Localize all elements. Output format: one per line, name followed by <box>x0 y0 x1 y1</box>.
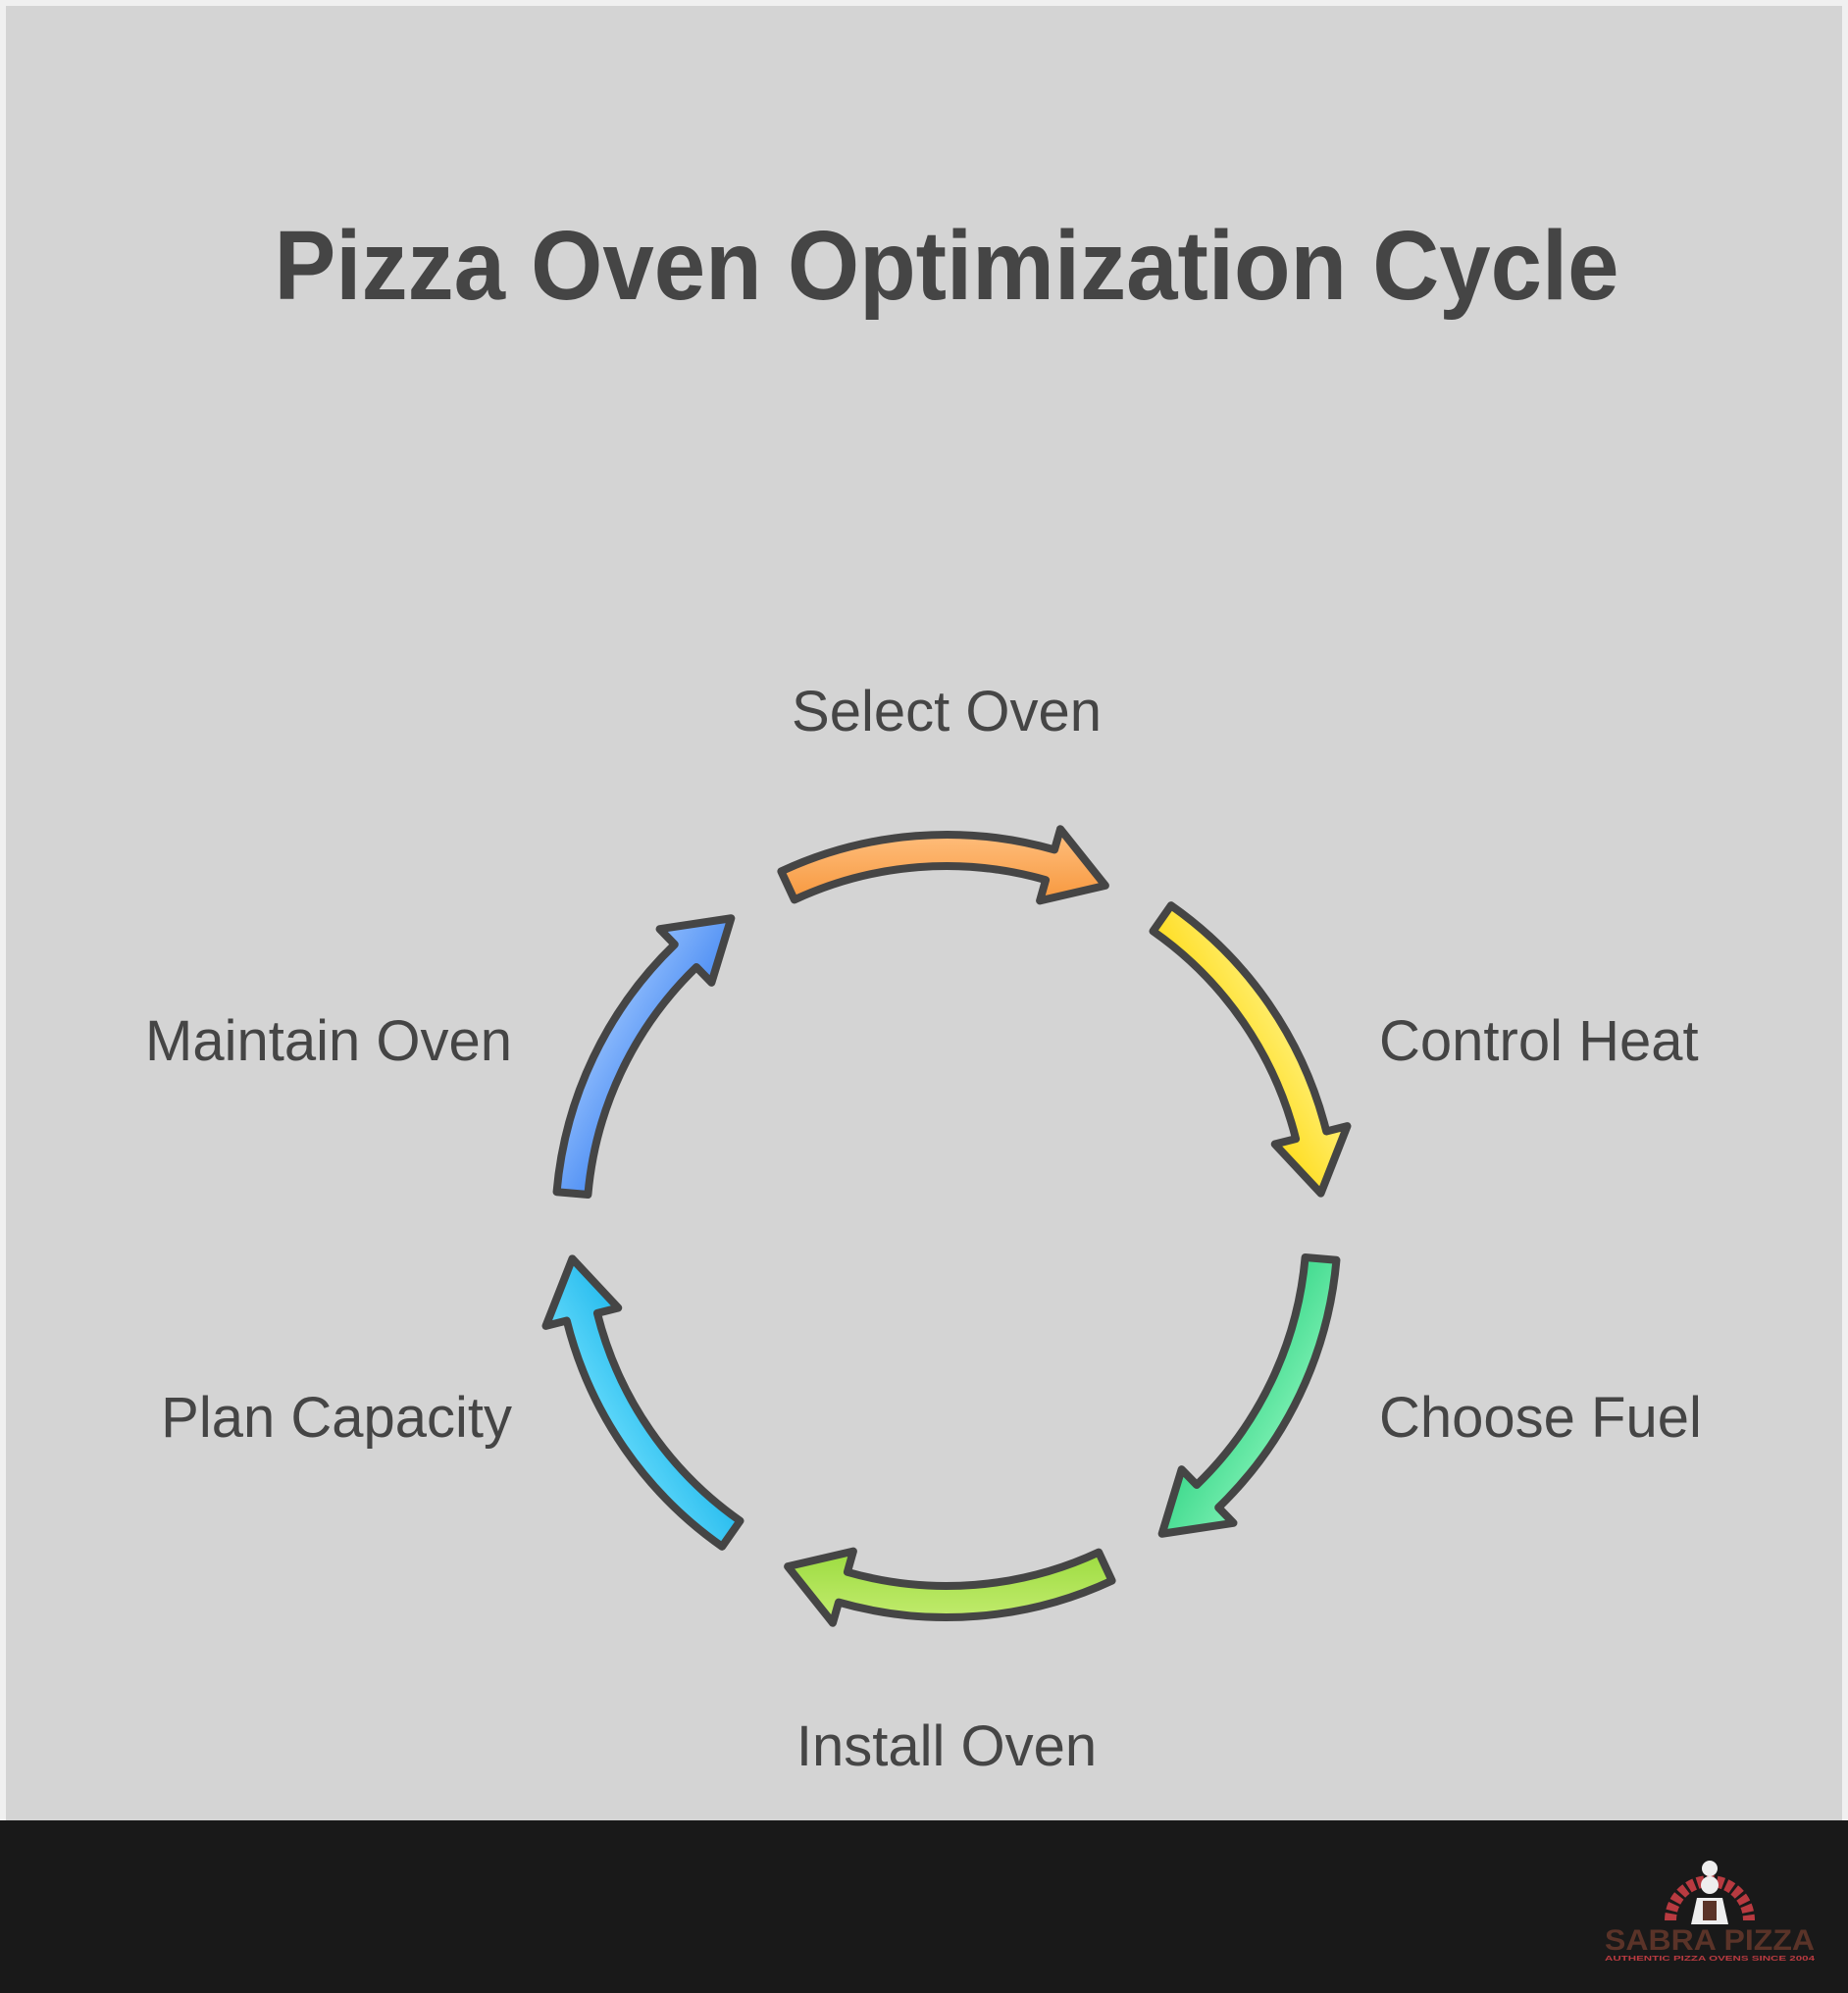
label: control heat: Control Heat <box>1379 1009 1699 1073</box>
arrow: control heat to choose fuel <box>1146 885 1369 1201</box>
logo: sabra pizza <box>1605 1861 1815 1963</box>
label: maintain oven: Maintain Oven <box>145 1009 512 1073</box>
logo: sabra pizza: AUTHENTIC PIZZA OVENS SINCE 2004 <box>1605 1956 1815 1963</box>
label: choose fuel: Choose Fuel <box>1379 1386 1702 1450</box>
footer bar <box>0 1820 1848 1993</box>
label: plan capacity: Plan Capacity <box>161 1386 512 1450</box>
cycle diagram <box>520 829 1373 1623</box>
label: install oven: Install Oven <box>796 1714 1097 1778</box>
arrow: select oven to control heat <box>781 829 1105 900</box>
title: Pizza Oven Optimization Cycle <box>275 211 1618 321</box>
labels <box>145 680 1702 1778</box>
logo: sabra pizza: SABRA PIZZA <box>1605 1924 1815 1957</box>
label: select oven: Select Oven <box>792 680 1102 743</box>
arrow: plan capacity to maintain oven <box>524 1252 747 1567</box>
arrow: maintain oven to select oven <box>520 890 744 1206</box>
arrow: install oven to plan capacity <box>788 1552 1112 1623</box>
arrow: choose fuel to install oven <box>1149 1246 1373 1562</box>
